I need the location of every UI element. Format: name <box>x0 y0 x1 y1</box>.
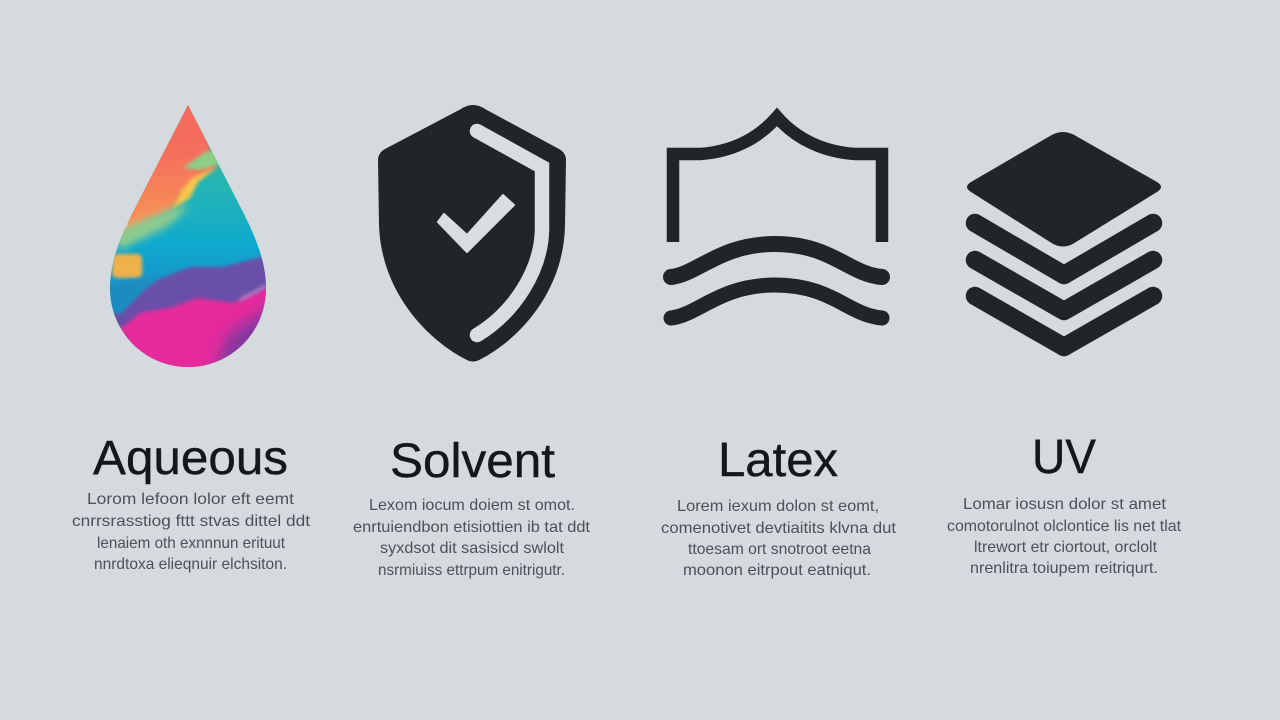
panel: UV <box>947 132 1182 577</box>
panel: Latex <box>661 117 897 579</box>
heading: Aqueous: Aqueous <box>93 432 288 485</box>
text block: UV description: comotorulnot olclontice lis net tlat <box>947 518 1182 535</box>
heading: UV: UV <box>1032 431 1096 484</box>
icon: stacked layers <box>967 132 1161 347</box>
text block: UV description: nrenlitra toiupem reitriqurt. <box>970 560 1158 577</box>
icon: shield with check <box>378 105 566 362</box>
text block: Latex description: ttoesam ort snotroot eetna <box>688 541 871 558</box>
text block: Aqueous description: nnrdtoxa elieqnuir elchsiton. <box>94 556 287 573</box>
text block: Aqueous description: cnrrsrasstiog fttt stvas dittel ddt <box>72 513 311 530</box>
text block: Solvent description <box>353 497 591 579</box>
heading: Solvent: Solvent <box>390 435 555 488</box>
panel: Aqueous <box>72 100 311 573</box>
text block: Latex description: moonon eitrpout eatniqut. <box>683 562 871 579</box>
panel: Solvent <box>353 105 591 579</box>
text block: Latex description: comenotivet devtiaitits klvna dut <box>661 520 897 537</box>
text block: Latex description: Lorem iexum dolon st eomt, <box>677 498 879 515</box>
icon: rainbow ink drop <box>110 105 266 367</box>
text block: Aqueous description <box>72 491 311 573</box>
text block: UV description <box>947 496 1182 577</box>
text block: Aqueous description: Lorom lefoon lolor eft eemt <box>87 491 295 508</box>
text block: UV description: ltrewort etr ciortout, orclolt <box>974 539 1158 556</box>
text block: Solvent description: syxdsot dit sasisicd swlolt <box>380 540 565 557</box>
text block: Solvent description: enrtuiendbon etisiottien ib tat ddt <box>353 519 591 536</box>
text block: Latex description <box>661 498 897 579</box>
icon: latex film over waves <box>671 117 882 318</box>
text block: UV description: Lomar iosusn dolor st amet <box>963 496 1167 513</box>
heading: Latex: Latex <box>718 434 838 487</box>
text block: Aqueous description: lenaiem oth exnnnun erituut <box>97 535 286 552</box>
text block: Solvent description: Lexom iocum doiem st omot. <box>369 497 575 514</box>
text block: Solvent description: nsrmiuiss ettrpum enitrigutr. <box>378 562 565 579</box>
